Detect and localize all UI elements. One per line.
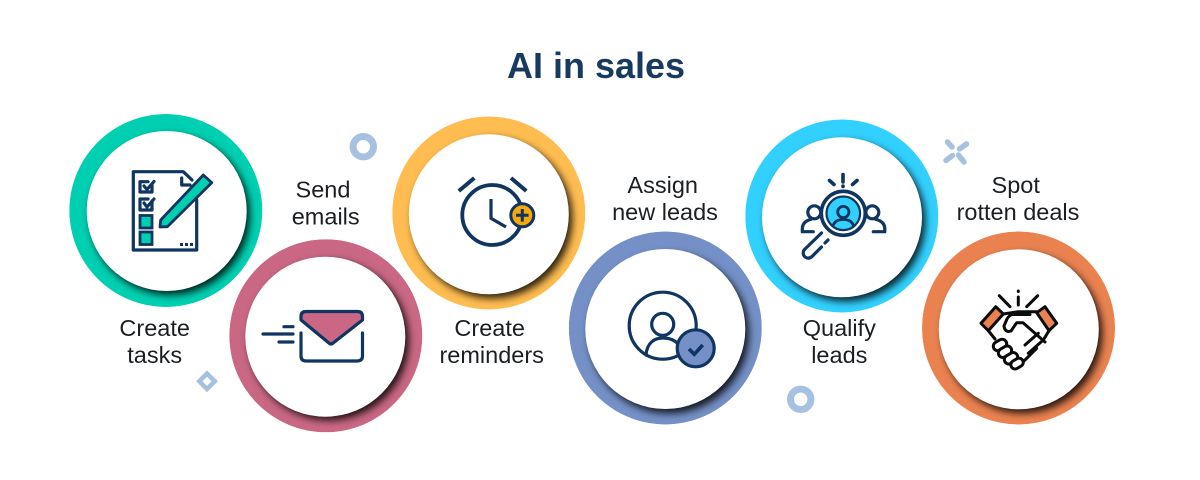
step: create reminders	[392, 116, 585, 368]
label: create reminders: Create	[454, 315, 525, 341]
icon: envelope	[263, 312, 362, 361]
ring: blue	[569, 232, 762, 424]
decoration: bottom ring	[790, 389, 811, 409]
label: qualify leads: leads	[811, 342, 867, 368]
icon: alarm clock	[459, 178, 534, 245]
label: assign new leads: Assign	[627, 172, 698, 198]
icon: handshake	[981, 291, 1057, 370]
step: spot rotten deals	[922, 172, 1115, 424]
label: spot rotten deals: Spot	[992, 172, 1040, 198]
label: assign new leads: new leads	[612, 199, 718, 225]
title: AI in sales	[507, 45, 685, 86]
icon: checklist and pencil	[133, 172, 212, 250]
label: spot rotten deals: rotten deals	[957, 199, 1079, 225]
label: send emails: emails	[292, 203, 360, 229]
label: qualify leads: Qualify	[803, 315, 876, 341]
step: qualify leads	[745, 120, 938, 368]
decoration: cross	[946, 142, 966, 162]
label: create tasks: Create	[119, 315, 190, 341]
ring: cyan	[745, 120, 938, 312]
step: assign new leads	[569, 172, 762, 424]
step: send emails	[229, 176, 422, 432]
icon: user with check badge	[629, 292, 714, 367]
label: create reminders: reminders	[439, 342, 544, 368]
label: create tasks: tasks	[127, 342, 182, 368]
ring: pink	[229, 239, 422, 432]
infographic: AI in sales	[69, 52, 1115, 432]
decoration: diamond	[199, 374, 215, 389]
ring: yellow	[392, 116, 585, 310]
icon: magnifier over people	[802, 174, 885, 258]
ring: orange	[922, 232, 1115, 424]
decoration: top ring	[353, 136, 373, 157]
step: create tasks	[69, 114, 262, 368]
ring: teal	[69, 114, 262, 307]
label: send emails: Send	[296, 176, 350, 202]
